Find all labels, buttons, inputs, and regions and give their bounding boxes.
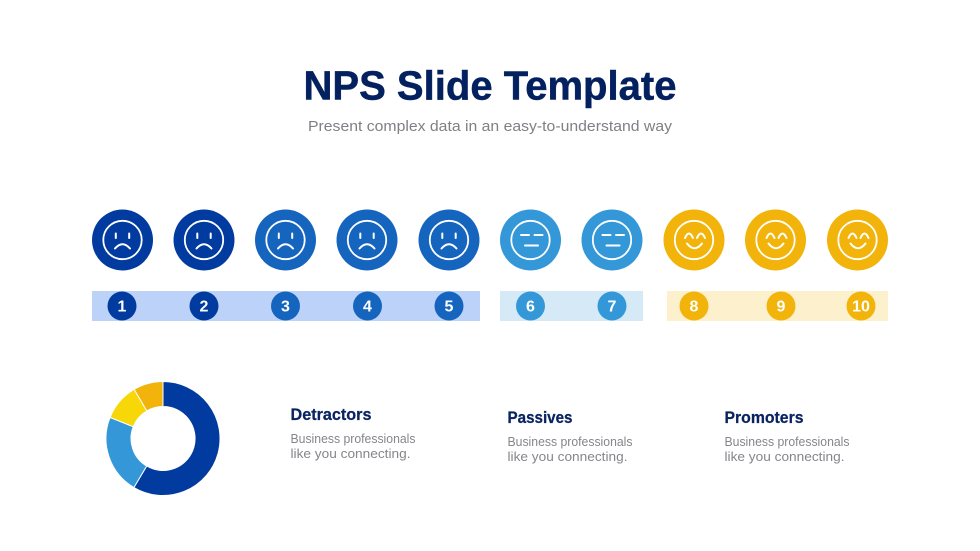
icon: neutral face 7 [582, 210, 642, 270]
icon: sad face 5 [418, 210, 480, 270]
score band: detractors 1-5: 5 [445, 298, 454, 316]
icon: sad face 1 [92, 210, 153, 270]
text block: passives: Passives [508, 409, 572, 427]
icon: sad face 3 [255, 210, 316, 270]
text block: detractors: like you connecting. [290, 446, 410, 461]
icon: happy face 10 [827, 210, 888, 270]
text block: detractors: Detractors [290, 406, 372, 424]
text block: passives: Business professionals [508, 434, 633, 449]
text block: detractors: Business professionals [290, 431, 416, 446]
score band: promoters 8-10: 8 [690, 298, 699, 316]
score band: detractors 1-5: 4 [363, 298, 372, 316]
score band: detractors 1-5: 1 [118, 298, 127, 316]
score band: detractors 1-5: 3 [281, 298, 290, 316]
text block: promoters: Business professionals [724, 434, 850, 449]
text block: passives [508, 409, 633, 464]
score band: promoters 8-10: 9 [777, 298, 786, 316]
score band: detractors 1-5 [92, 291, 480, 321]
score band: detractors 1-5: 2 [200, 298, 209, 316]
score band: passives 6-7: 7 [608, 298, 617, 316]
text block: promoters [724, 409, 850, 464]
score band: promoters 8-10: 10 [852, 298, 870, 316]
icon: happy face 8 [664, 210, 724, 270]
score band: promoters 8-10 [667, 291, 888, 321]
score band: passives 6-7 [500, 291, 643, 321]
icon: sad face 2 [174, 210, 234, 270]
donut chart [106, 382, 220, 496]
icon: happy face 9 [745, 210, 806, 270]
icon: sad face 4 [336, 210, 398, 270]
icon: neutral face 6 [500, 210, 561, 270]
text block: detractors [290, 406, 416, 461]
subtitle: Present complex data in an easy-to-understand way [308, 119, 673, 135]
text block: passives: like you connecting. [508, 449, 628, 464]
score band: passives 6-7: 6 [526, 298, 535, 316]
text block: promoters: Promoters [724, 409, 804, 427]
title: NPS Slide Template [304, 62, 676, 108]
text block: promoters: like you connecting. [724, 449, 844, 464]
